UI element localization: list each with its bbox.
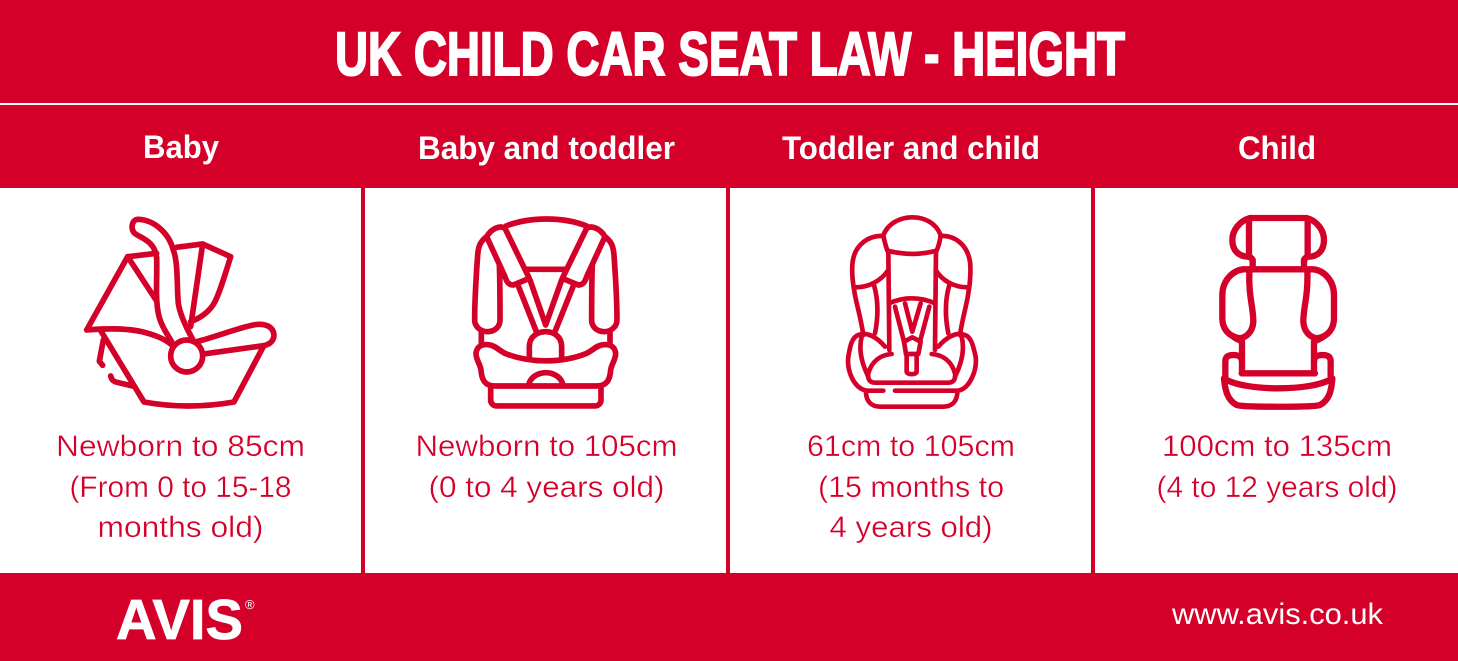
icon: harness seat <box>475 219 617 406</box>
text: Baby range: Newborn to 85cm <box>56 430 305 463</box>
text: Baby range: (From 0 to 15-18 <box>70 471 292 504</box>
text: Baby range <box>56 430 305 544</box>
footer band <box>0 573 1458 661</box>
column heading: Child: Child <box>1238 130 1316 166</box>
column heading: Baby and toddler: Baby and toddler <box>418 130 675 166</box>
text: Baby and toddler range <box>416 430 678 504</box>
column heading: Baby: Baby <box>143 129 219 165</box>
column heading: Toddler and child: Toddler and child <box>782 130 1040 166</box>
title: UK CHILD CAR SEAT LAW - HEIGHT <box>335 20 1125 88</box>
text: Child range: (4 to 12 years old) <box>1156 471 1398 504</box>
text: Child range <box>1156 430 1398 504</box>
text: Toddler and child range <box>807 430 1015 544</box>
icon: infant carrier <box>87 219 274 406</box>
column dividers <box>361 188 1095 573</box>
icon: booster seat <box>1222 218 1334 407</box>
text: Toddler and child range: 4 years old) <box>830 511 992 544</box>
logo: AVIS: AVIS <box>116 588 243 652</box>
text: Baby range: months old) <box>98 511 264 544</box>
text: Toddler and child range: 61cm to 105cm <box>807 430 1015 463</box>
text: Toddler and child range: (15 months to <box>818 471 1004 504</box>
logo: AVIS: ® <box>245 597 255 612</box>
text: Baby and toddler range: (0 to 4 years old) <box>428 471 664 504</box>
website url: www.avis.co.uk <box>1171 598 1384 631</box>
text: Baby and toddler range: Newborn to 105cm <box>416 430 678 463</box>
text: Child range: 100cm to 135cm <box>1162 430 1392 463</box>
icon: toddler seat <box>848 217 976 407</box>
header band <box>0 0 1458 188</box>
